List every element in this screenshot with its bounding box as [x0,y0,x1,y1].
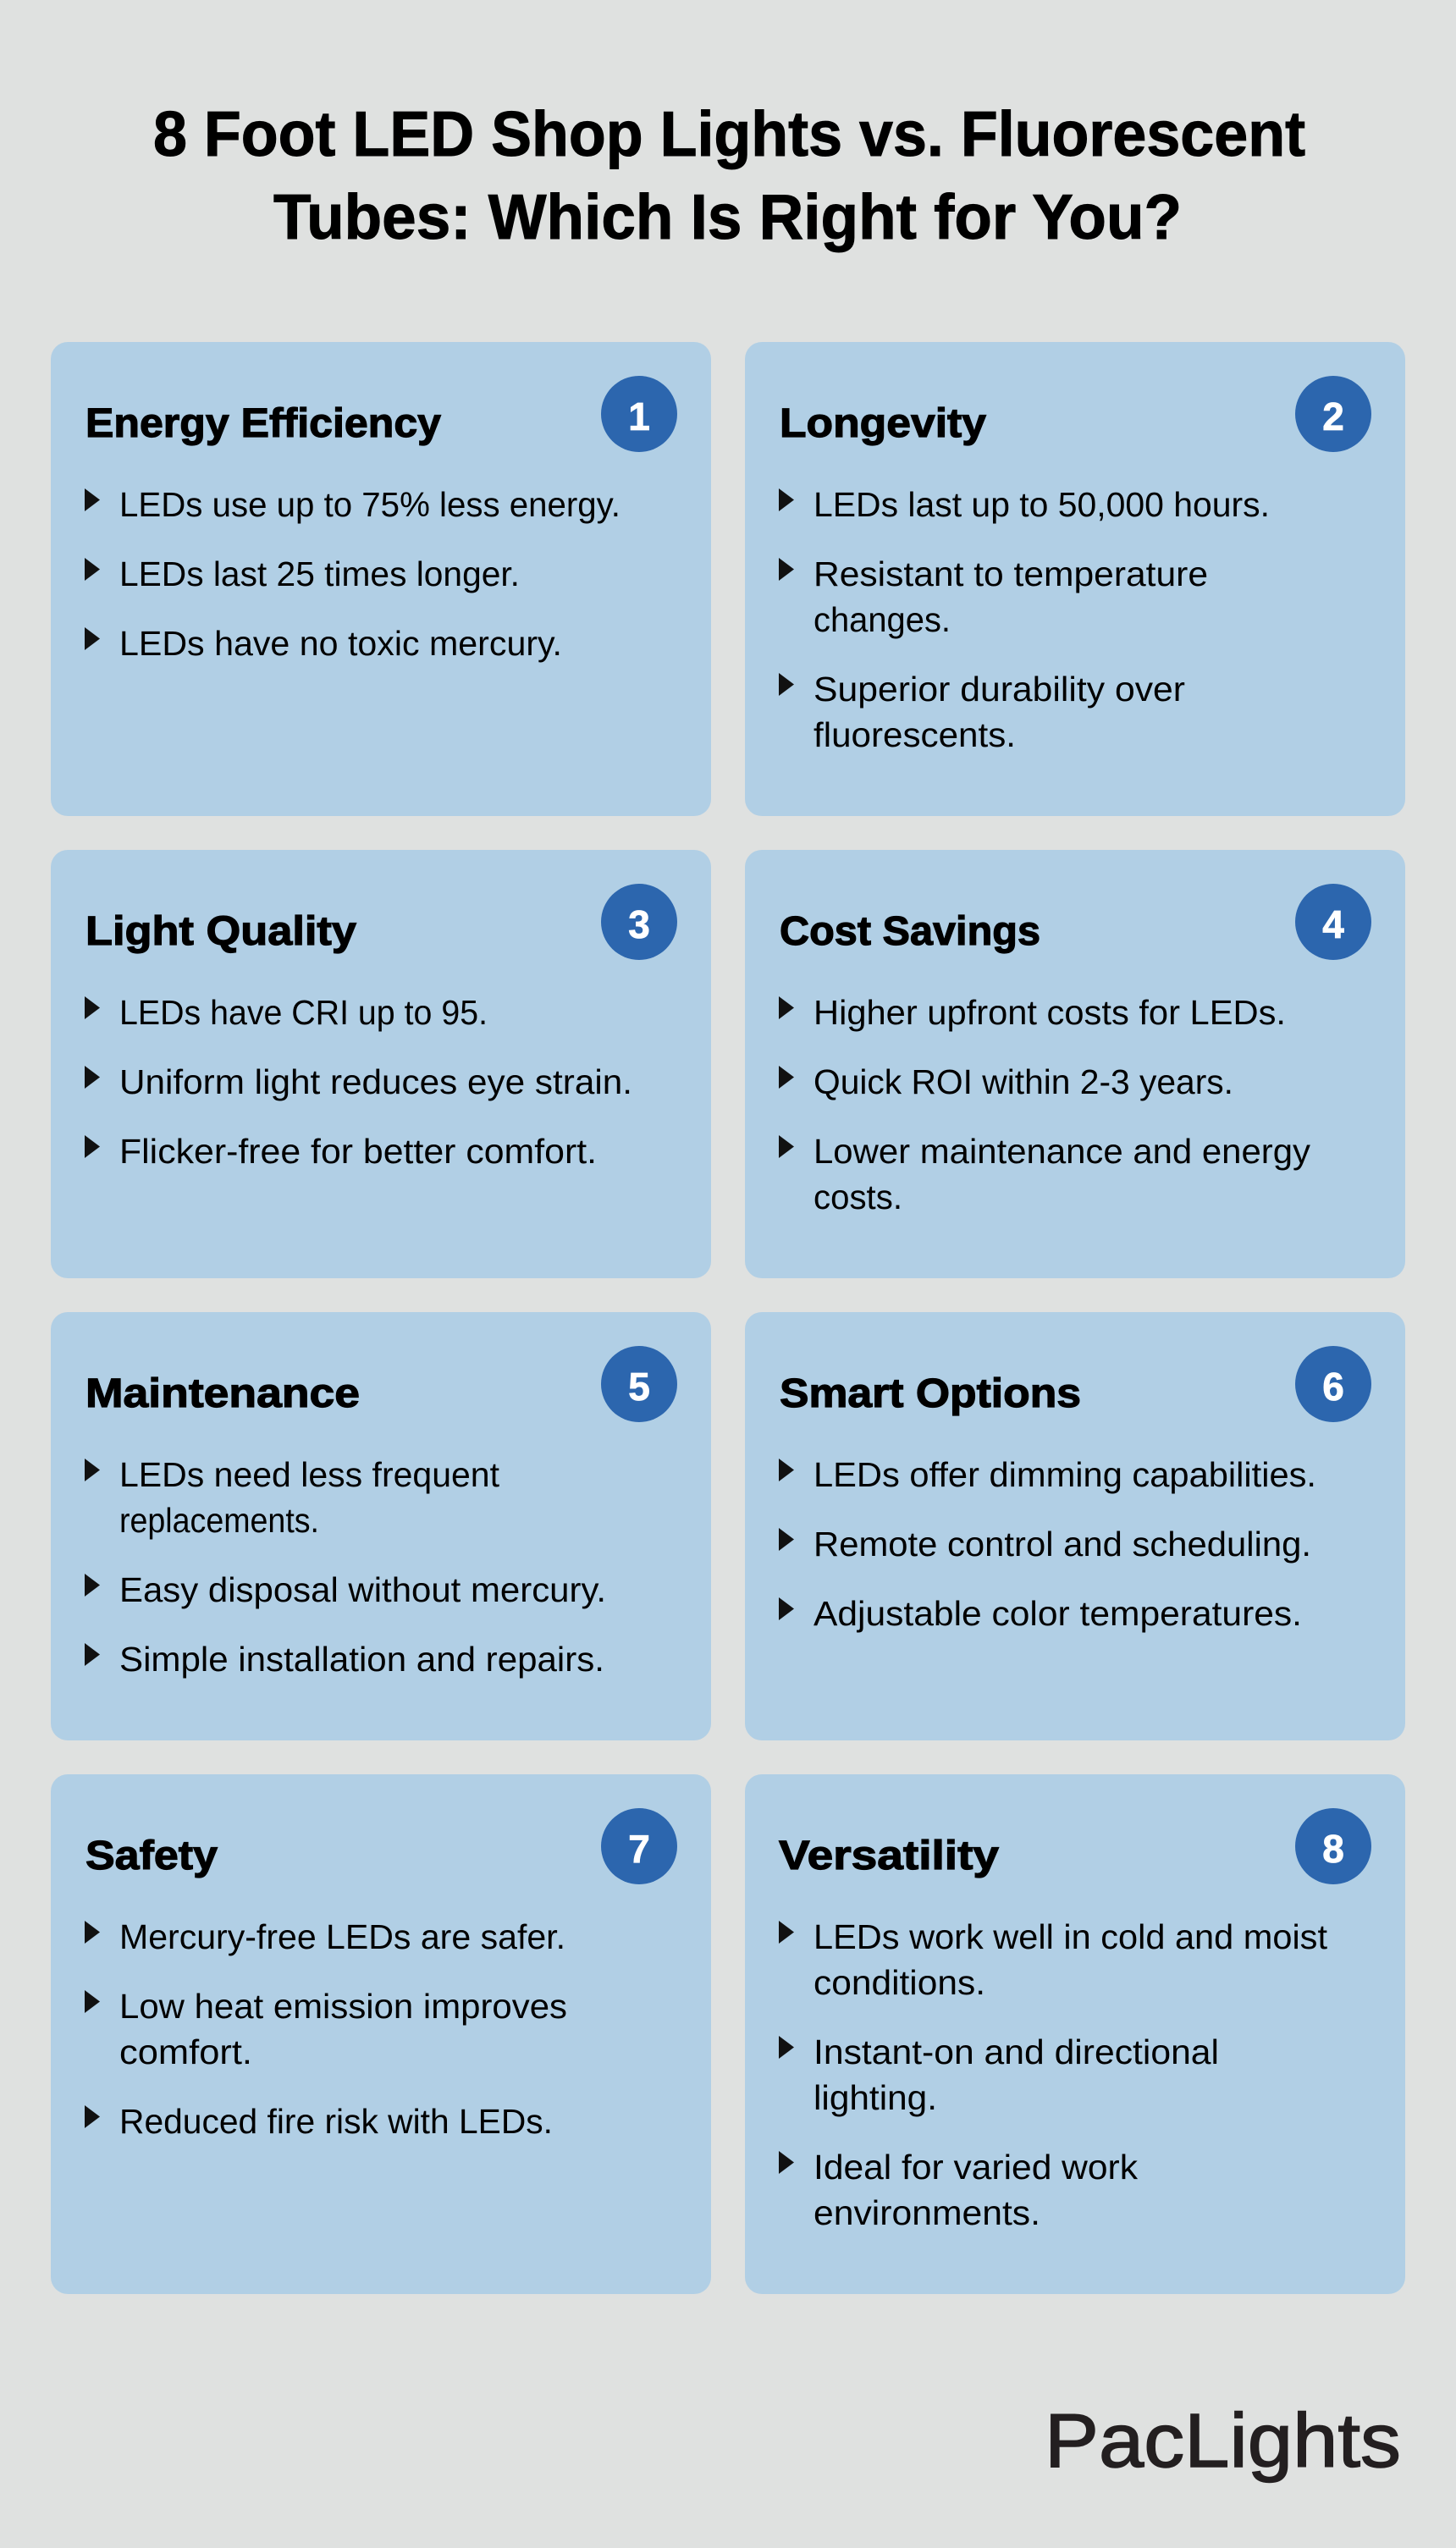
bullet list: Easy disposal without mercury. [119,1570,606,1609]
bullet list: LEDs offer dimming capabilities. [813,1455,1316,1494]
number badge 7: 7 [628,1827,650,1871]
bullet list: Uniform light reduces eye strain. [119,1062,632,1101]
bullet list: Lower maintenance and energy [813,1132,1311,1171]
bullet list: environments. [813,2193,1040,2232]
bullet list: Resistant to temperature [813,554,1208,593]
number badge 3 [601,884,677,960]
bullet list: Reduced fire risk with LEDs. [119,2102,553,2141]
bullet list: replacements. [119,1501,319,1540]
panel: longevity [745,342,1405,816]
panel: versatility [745,1774,1405,2294]
bullet list: Superior durability over [813,670,1185,709]
number badge 4: 4 [1322,902,1344,946]
bullet list: Ideal for varied work [813,2148,1139,2187]
number badge 4 [1295,884,1371,960]
bullet list: LEDs use up to 75% less energy. [119,485,620,524]
number badge 5 [601,1346,677,1422]
panel: energy efficiency [51,342,711,816]
bullet list: Low heat emission improves [119,1987,567,2026]
bullet list: costs. [813,1177,902,1216]
bullet list: fluorescents. [813,715,1016,754]
panel: smart options [745,1312,1405,1740]
heading: light quality: Light Quality [85,909,356,954]
number badge 7 [601,1808,677,1884]
bullet list [85,1917,567,2141]
number badge 3: 3 [628,902,650,946]
bullet list: Mercury-free LEDs are safer. [119,1917,565,1956]
panel: maintenance [51,1312,711,1740]
heading: longevity: Longevity [780,401,986,446]
bullet list: LEDs last 25 times longer. [119,554,520,593]
bullet list: LEDs last up to 50,000 hours. [813,485,1270,524]
heading: maintenance: Maintenance [85,1371,360,1416]
number badge 5: 5 [628,1365,650,1409]
bullet list [779,993,1311,1216]
bullet list: Instant-on and directional [813,2032,1219,2071]
title [153,98,1305,252]
title: 8 Foot LED Shop Lights vs. Fluorescent [153,98,1305,169]
number badge 1: 1 [628,394,650,438]
heading: safety: Safety [85,1834,218,1878]
number badge 2: 2 [1322,394,1344,438]
heading: smart options: Smart Options [780,1371,1081,1416]
bullet list: Quick ROI within 2-3 years. [813,1062,1233,1101]
bullet list [85,1455,606,1679]
bullet list [85,485,620,663]
bullet list: Adjustable color temperatures. [813,1594,1302,1633]
number badge 6: 6 [1322,1365,1344,1409]
number badge 8: 8 [1322,1827,1344,1871]
number badge 8 [1295,1808,1371,1884]
bullet list [779,485,1270,754]
bullet list: Simple installation and repairs. [119,1640,604,1679]
heading: versatility: Versatility [779,1834,999,1878]
bullet list: LEDs have CRI up to 95. [119,993,488,1032]
heading: cost savings: Cost Savings [780,909,1040,954]
bullet list: changes. [813,600,951,639]
bullet list [779,1917,1328,2232]
panel: safety [51,1774,711,2294]
bullet list: comfort. [119,2032,252,2071]
number badge 6 [1295,1346,1371,1422]
bullet list: lighting. [813,2078,937,2117]
heading: energy efficiency: Energy Efficiency [85,401,441,446]
number badge 2 [1295,376,1371,452]
panel: cost savings [745,850,1405,1278]
bullet list: conditions. [813,1963,985,2002]
bullet list [85,993,632,1171]
bullet list [779,1455,1316,1633]
panel: light quality [51,850,711,1278]
bullet list: LEDs need less frequent [119,1455,500,1494]
number badge 1 [601,376,677,452]
bullet list: LEDs work well in cold and moist [813,1917,1328,1956]
title: Tubes: Which Is Right for You? [273,181,1182,252]
bullet list: Flicker-free for better comfort. [119,1132,597,1171]
bullet list: Remote control and scheduling. [813,1525,1311,1564]
bullet list: Higher upfront costs for LEDs. [813,993,1286,1032]
bullet list: LEDs have no toxic mercury. [119,624,562,663]
logo: PacLights: PacLights [1045,2399,1401,2484]
